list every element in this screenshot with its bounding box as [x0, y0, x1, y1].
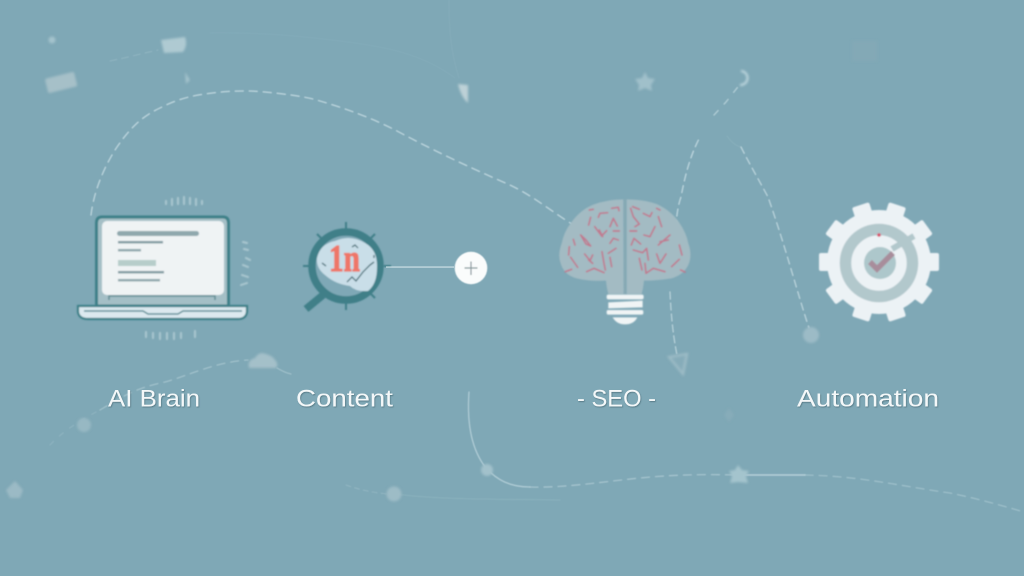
connector line to plus — [386, 266, 454, 268]
plus sign — [464, 262, 478, 275]
icon: faded star — [635, 72, 655, 91]
laptop base — [78, 306, 247, 319]
laptop icon — [78, 197, 250, 339]
icon: dot lower middle — [386, 486, 402, 502]
red dot — [877, 233, 881, 237]
icon: faded pin — [185, 72, 190, 84]
target centre — [864, 247, 896, 279]
icon: faded dot top left — [48, 36, 56, 44]
brain outline — [317, 238, 377, 291]
check mark — [870, 253, 893, 269]
icon: hollow triangle — [669, 354, 687, 374]
bulb screw base — [607, 295, 644, 324]
label: SEO: - SEO - — [577, 386, 656, 412]
decorative faded icons — [6, 36, 877, 502]
white circle — [455, 252, 487, 284]
icon: blob lower left — [6, 481, 23, 498]
pink veins — [565, 207, 685, 273]
target ring — [846, 230, 912, 296]
labels — [108, 386, 939, 412]
icon: cloud — [249, 353, 277, 368]
magnifier icon — [303, 222, 391, 310]
lens — [312, 232, 380, 300]
target arm — [892, 236, 914, 249]
centre split — [623, 199, 627, 294]
icon: faded arrow head — [458, 84, 468, 103]
right lobe — [627, 199, 690, 294]
icon: dot right — [803, 327, 819, 343]
icon: faded ticket — [45, 72, 77, 93]
plus button — [455, 252, 487, 284]
laptop lid — [96, 217, 228, 306]
gear icon — [819, 202, 939, 322]
ticks — [303, 222, 391, 310]
icon: crescent — [740, 71, 748, 85]
label: AI Brain: AI Brain — [108, 386, 200, 412]
screen text lines — [117, 231, 199, 281]
chart squiggle — [322, 245, 374, 282]
base groove — [84, 311, 242, 314]
icon: faint square top right — [852, 41, 877, 61]
screen hinge line — [109, 296, 215, 300]
lightbulb brain icon — [559, 199, 690, 324]
red letter mark: 1n — [329, 238, 360, 280]
label: Automation: Automation — [797, 386, 939, 412]
left lobe — [559, 199, 624, 294]
icon: star lower centre — [729, 465, 749, 483]
radiating ticks — [146, 197, 250, 339]
label: Content: Content — [296, 386, 393, 412]
icon: faded speech shape — [161, 37, 186, 53]
gear with ten teeth — [819, 202, 939, 322]
icon: dot lower centre — [481, 464, 493, 476]
icon: faint diamond — [724, 408, 734, 422]
icon: blob left — [77, 418, 91, 432]
handle — [306, 295, 323, 309]
laptop screen — [102, 221, 224, 295]
